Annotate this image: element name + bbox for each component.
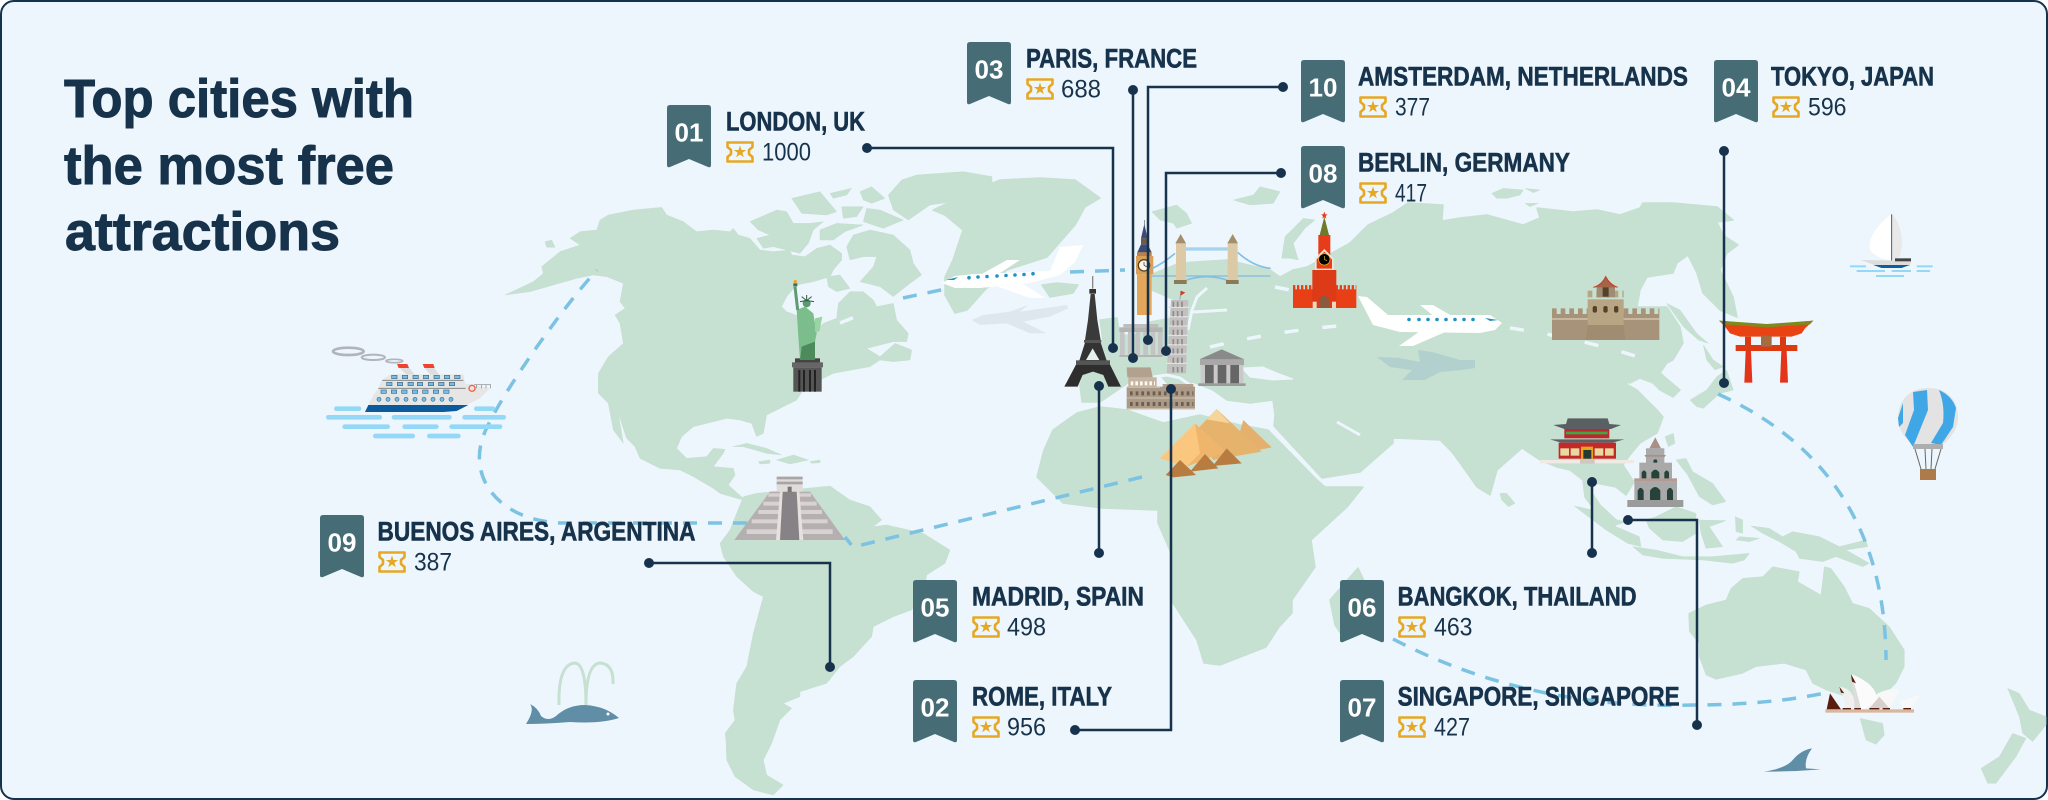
iceland xyxy=(1042,283,1078,297)
label: berlin: BERLIN, GERMANY xyxy=(1358,148,1570,178)
label: tokyo xyxy=(1714,60,1934,122)
monument: tower bridge xyxy=(1152,234,1271,284)
title xyxy=(64,69,414,262)
label: rome xyxy=(913,680,1112,742)
label: tokyo: 596 xyxy=(1808,94,1846,122)
label: berlin: 08 xyxy=(1309,158,1337,188)
label: buenos aires: 387 xyxy=(414,548,452,576)
label: bangkok: 463 xyxy=(1434,614,1472,642)
label: london: 1000 xyxy=(762,138,811,166)
monument: eiffel tower xyxy=(1064,276,1121,387)
monument: sydney opera house xyxy=(1825,674,1920,713)
north america xyxy=(505,172,992,501)
monument: statue of liberty xyxy=(792,280,823,392)
label: bangkok xyxy=(1340,580,1637,642)
label: amsterdam: AMSTERDAM, NETHERLANDS xyxy=(1358,62,1688,92)
monument: big ben xyxy=(1136,220,1153,315)
label: rome: 02 xyxy=(921,692,949,722)
title: the most free xyxy=(64,136,394,196)
label: singapore: 427 xyxy=(1434,714,1470,742)
inland seas xyxy=(1153,288,1360,435)
monument: pyramids xyxy=(1160,409,1272,477)
label: bangkok: BANGKOK, THAILAND xyxy=(1398,582,1637,612)
label: rome: ROME, ITALY xyxy=(972,682,1112,712)
icon: plane atlantic xyxy=(942,245,1083,298)
label: paris xyxy=(967,42,1197,104)
icon: hot air balloon xyxy=(1898,388,1958,480)
south america xyxy=(720,486,950,795)
eurasia xyxy=(1080,203,1738,525)
label: amsterdam: 10 xyxy=(1309,72,1337,102)
title: Top cities with xyxy=(64,69,414,129)
monument: vietnamese pagoda xyxy=(1627,437,1683,507)
southeast asia and oceania xyxy=(1574,458,2046,783)
label: paris: 03 xyxy=(975,54,1003,84)
label: paris: 688 xyxy=(1061,76,1101,104)
label: madrid: MADRID, SPAIN xyxy=(972,582,1144,612)
icon: plane shadow asia xyxy=(1377,350,1475,380)
label: madrid: 498 xyxy=(1007,614,1046,642)
icon: cruise ship xyxy=(326,348,506,438)
monument: parthenon xyxy=(1198,349,1246,386)
caribbean small islands xyxy=(758,455,820,464)
greenland xyxy=(933,178,1100,313)
icon: whale xyxy=(526,663,619,724)
uk xyxy=(1100,318,1120,342)
title: attractions xyxy=(65,202,340,262)
icon: shark fin xyxy=(1764,748,1821,772)
label: tokyo: TOKYO, JAPAN xyxy=(1771,62,1934,92)
monument: kremlin tower xyxy=(1293,212,1356,308)
label: berlin xyxy=(1301,146,1570,208)
icon: plane shadow atlantic xyxy=(972,305,1068,333)
icon: plane asia xyxy=(1358,296,1502,346)
monument: great wall xyxy=(1552,277,1659,340)
label: rome: 956 xyxy=(1007,714,1046,742)
label: berlin: 417 xyxy=(1395,180,1427,208)
label: paris: PARIS, FRANCE xyxy=(1026,44,1197,74)
dashed routes xyxy=(479,270,1886,705)
label: amsterdam xyxy=(1301,60,1688,122)
monument: colosseum xyxy=(1127,367,1195,409)
label: singapore: 07 xyxy=(1348,692,1376,722)
monument: tower of pisa xyxy=(1166,291,1189,373)
label: singapore xyxy=(1340,680,1680,742)
label: singapore: SINGAPORE, SINGAPORE xyxy=(1398,682,1680,712)
label: amsterdam: 377 xyxy=(1395,94,1430,122)
label: madrid: 05 xyxy=(921,592,949,622)
africa xyxy=(1037,407,1363,665)
leader lines xyxy=(644,82,1729,735)
monument: torii gate xyxy=(1719,321,1813,383)
label: madrid xyxy=(913,580,1144,642)
monument: korean temple xyxy=(1540,418,1634,464)
label: london: 01 xyxy=(675,118,703,148)
world map xyxy=(505,172,2046,795)
monument: brandenburg gate xyxy=(1119,324,1163,357)
arctic russian islands xyxy=(1152,187,1315,260)
monument: chichen itza xyxy=(734,477,845,540)
label: buenos aires xyxy=(320,515,696,577)
label: buenos aires: 09 xyxy=(328,528,356,558)
icon: sailboat xyxy=(1850,214,1933,277)
label: bangkok: 06 xyxy=(1348,592,1376,622)
label: london xyxy=(667,105,865,167)
label: london: LONDON, UK xyxy=(726,106,865,136)
caribbean islands xyxy=(733,443,782,455)
madagascar xyxy=(1330,568,1366,640)
label: buenos aires: BUENOS AIRES, ARGENTINA xyxy=(378,516,696,546)
label: tokyo: 04 xyxy=(1722,72,1751,102)
east asian islands xyxy=(1492,188,1733,507)
